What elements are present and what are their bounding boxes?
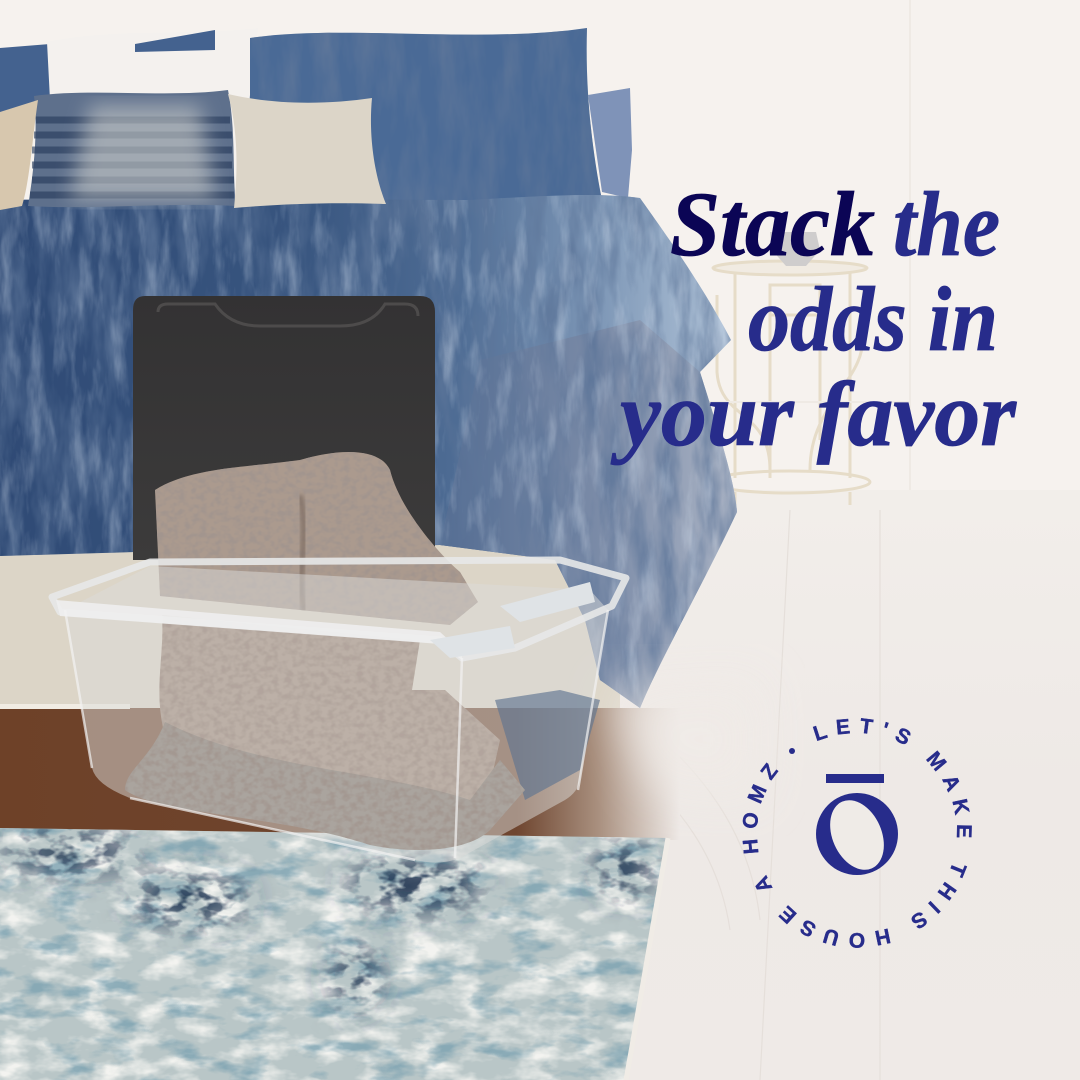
- blue quilt seen through bin: [495, 690, 600, 800]
- comforter: [0, 190, 740, 715]
- headline: [610, 173, 1017, 465]
- bin handles: [430, 582, 595, 658]
- bed skirt: [0, 545, 620, 708]
- bin rim: [52, 560, 626, 658]
- wood floor: [0, 708, 680, 840]
- floor: pale planks: [560, 490, 1080, 1080]
- blanket above bin: [150, 445, 485, 630]
- skirt edge shadow: [0, 704, 130, 709]
- beaded cream pillow: [228, 94, 386, 208]
- white back pillow: [47, 28, 258, 100]
- wall background: [0, 0, 1080, 520]
- rug dark patches: [0, 834, 655, 1008]
- bin edge highlights: [65, 610, 608, 860]
- headline word Stack: Stack: [670, 173, 875, 275]
- logo ring: [816, 793, 898, 875]
- wall trim: [690, 0, 910, 490]
- striped pillow: [28, 90, 236, 207]
- floor fade near bed: [610, 680, 760, 800]
- logo inner cutout: [820, 792, 894, 878]
- pale blue rear pillow: [588, 88, 632, 198]
- logo badge: [742, 718, 972, 948]
- large blue velvet pillow: [250, 28, 601, 200]
- bin body: [65, 566, 608, 863]
- storage bin lid: [133, 296, 435, 560]
- blue pillow peek: [135, 30, 215, 52]
- badge dot: [789, 748, 795, 754]
- side table: [710, 261, 870, 505]
- badge circular tagline: LET'S MAKE THIS HOUSE A HOMZ: [742, 718, 972, 948]
- headline word the: the: [893, 173, 1000, 275]
- bin front rim band: [56, 600, 462, 660]
- bowl on table: [770, 232, 820, 266]
- clear storage bin: [52, 560, 626, 863]
- headline line 3: your favor: [610, 363, 1017, 465]
- blanket inside bin: [159, 624, 500, 800]
- blanket fringe: [125, 722, 525, 850]
- rug: [0, 825, 680, 1080]
- logo bar: [826, 774, 884, 783]
- blue pillow left: [0, 44, 50, 116]
- headline line 2: odds in: [748, 268, 998, 370]
- cream pillow small left: [0, 100, 38, 210]
